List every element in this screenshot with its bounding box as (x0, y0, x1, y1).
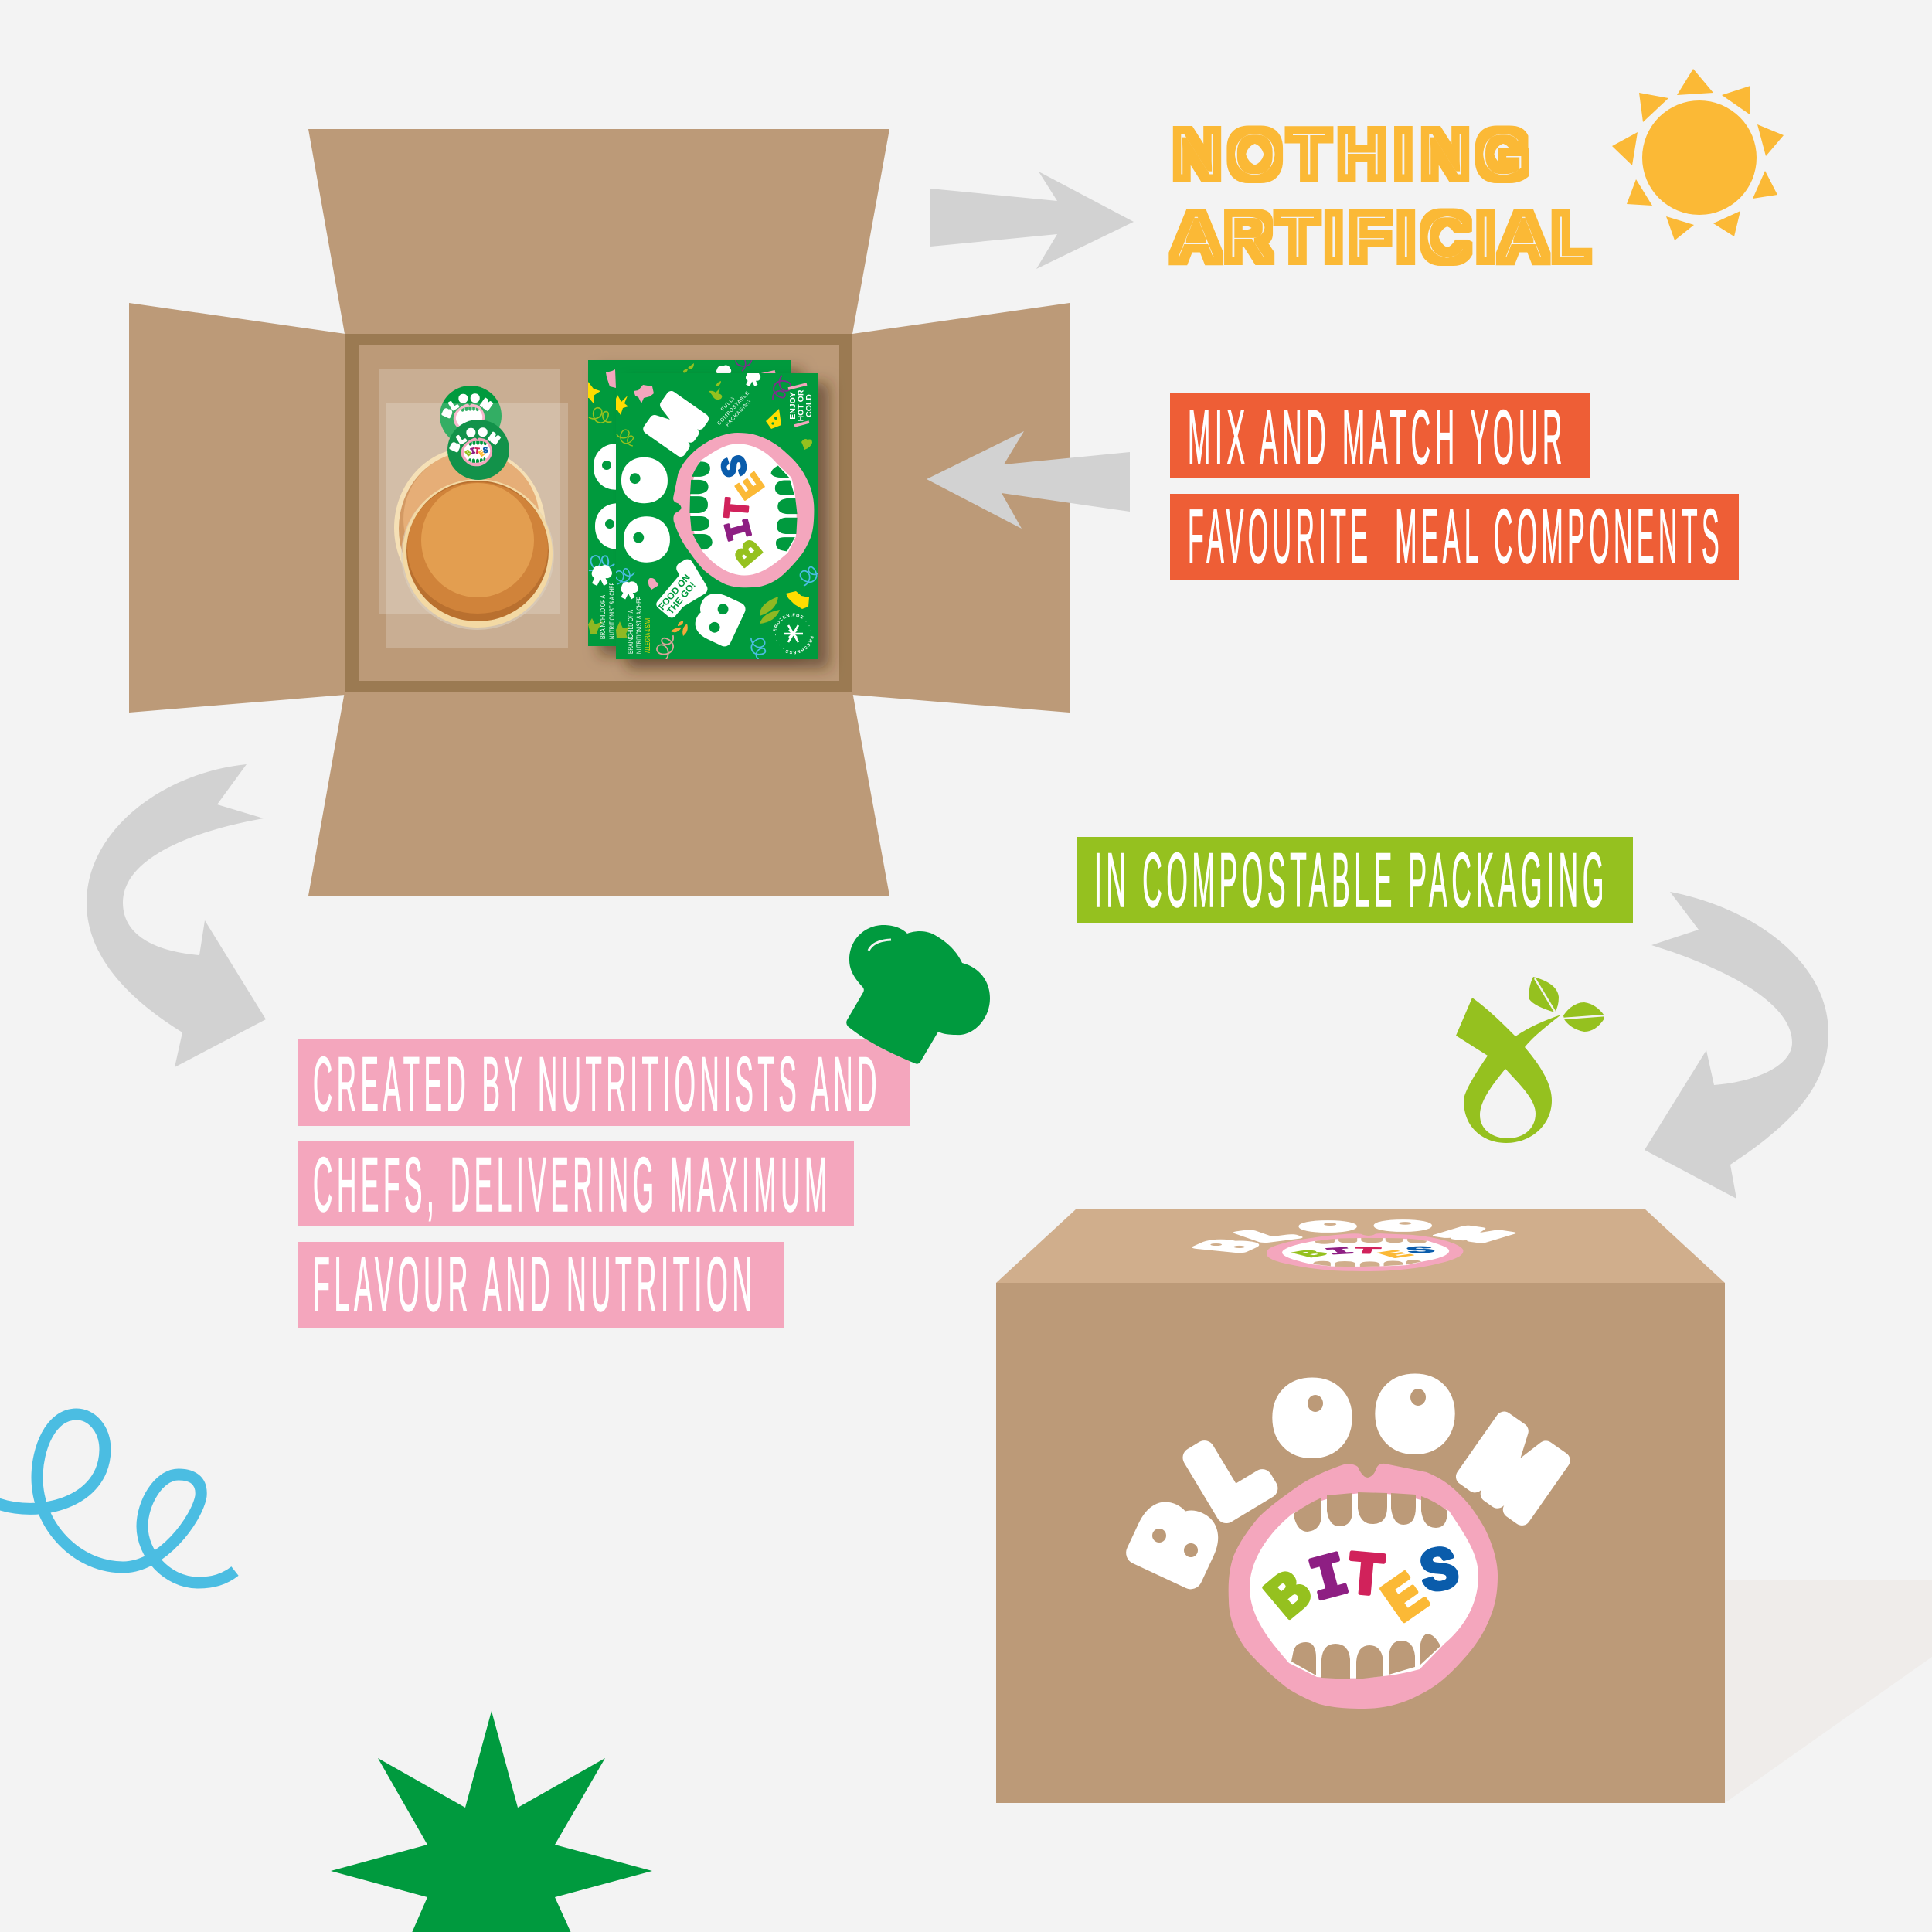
text: FLAVOUR AND NUTRITION (313, 1241, 757, 1327)
box front (996, 1283, 1725, 1803)
card text: fully compostable packaging: PACKAGING (725, 398, 753, 427)
label: chefs delivering (298, 1141, 854, 1227)
back sticker: O (472, 394, 479, 403)
card icon: cutlery (788, 384, 809, 426)
back sticker (440, 386, 502, 446)
front sticker: L (455, 432, 468, 446)
front sticker: O (480, 428, 487, 437)
front logo: Bloom Bites: B (1119, 1495, 1231, 1590)
card text: enjoy hot or cold (790, 389, 811, 421)
front logo: Bloom Bites: T (1345, 1543, 1387, 1614)
card icons: squiggles (611, 375, 821, 661)
box lid (996, 1209, 1725, 1283)
card icon: lime star (616, 621, 630, 638)
front pancake (401, 479, 554, 630)
front sticker: S (482, 446, 489, 456)
front logo: Bloom Bites: M (1447, 1398, 1580, 1539)
card logo: Bloom Bites: O (624, 523, 671, 556)
back sticker: L (447, 398, 460, 412)
text: CHEFS, DELIVERING MAXIMUM (313, 1141, 832, 1227)
label: created by nutritionists (298, 1039, 910, 1127)
back film packet (379, 369, 560, 614)
back sticker: B (440, 407, 454, 419)
back sticker: O (460, 394, 467, 403)
decoration: green star (331, 1711, 652, 1932)
lid logo (1187, 1219, 1523, 1271)
card logo: Bloom Bites: O (622, 464, 668, 496)
card badge: frozen for freshness (773, 614, 814, 654)
card badge: frozen for freshness: FROZEN FOR (773, 614, 804, 631)
back product card (584, 346, 791, 646)
card icon: pink heart (648, 578, 658, 590)
card text: enjoy hot or cold: ENJOY (788, 392, 798, 420)
open cardboard box (129, 129, 1070, 896)
label: mix and match (1170, 393, 1590, 480)
front logo: Bloom Bites: O (1386, 1373, 1444, 1454)
card logo: Bloom Bites: B (729, 531, 772, 572)
back product card: O (594, 451, 640, 483)
arrow: box to nothing artificial (930, 172, 1134, 269)
card text: brainchild: NUTRITIONIST & A CHEF: (635, 596, 643, 654)
lid logo: O (1308, 1220, 1349, 1233)
lid logo: T (1352, 1246, 1383, 1257)
lid logo: B (1187, 1238, 1269, 1253)
card artwork (616, 373, 818, 659)
card text: fully compostable packaging: COMPOSTABLE (716, 390, 751, 427)
lid logo: O (1383, 1219, 1423, 1232)
arrow: curved right (1645, 892, 1828, 1199)
card logo: Bloom Bites (622, 386, 814, 650)
box flap: left (129, 303, 345, 713)
card text: brainchild (628, 597, 650, 654)
card badge: frozen for freshness: FRESHNESS (785, 636, 814, 654)
arrow: curved left (87, 764, 266, 1067)
back product card: BRAINCHILD OF A (599, 595, 607, 639)
arrow: mix and match to box (927, 431, 1130, 529)
front logo: Bloom Bites: E (1372, 1562, 1441, 1638)
heading: nothing artificial (1174, 118, 1588, 273)
card icon: wheat (786, 591, 809, 609)
front sticker: O (468, 428, 474, 437)
card text: brainchild: ALLEGRA & SAM (644, 618, 651, 653)
back sticker: M (478, 396, 494, 413)
front sticker: B (464, 448, 474, 459)
lid logo: E (1372, 1249, 1422, 1260)
box flap: bottom (308, 692, 889, 896)
back pancake (394, 447, 546, 608)
front logo: Bloom Bites (1119, 1373, 1580, 1709)
lid logo: B (1287, 1248, 1338, 1260)
front product card (616, 372, 838, 677)
card icon: broccoli (746, 373, 760, 386)
card icon: cheese (766, 409, 781, 429)
label: flavour and nutrition (298, 1241, 784, 1328)
heading: nothing artificial: NOTHING (1174, 118, 1528, 190)
card logo: Bloom Bites: L (644, 558, 713, 617)
card logo: Bloom Bites: S (716, 452, 757, 480)
front logo: Bloom Bites: I (1304, 1543, 1356, 1617)
card logo: Bloom Bites: M (635, 386, 716, 462)
label: in compostable packaging (1077, 837, 1633, 923)
card text: enjoy hot or cold: COLD (804, 394, 814, 417)
front logo: Bloom Bites: S (1416, 1537, 1464, 1610)
box interior (359, 345, 839, 681)
lid logo: S (1403, 1245, 1438, 1256)
text: CREATED BY NUTRITIONISTS AND (313, 1041, 881, 1127)
card icon: sprout (709, 381, 722, 400)
card icon: pig (634, 385, 654, 403)
closed cardboard box (996, 1209, 1725, 1803)
card text: enjoy hot or cold: HOT OR (796, 389, 805, 421)
card logo: Bloom Bites: E (730, 465, 774, 505)
front sticker: T (474, 447, 481, 457)
heading: nothing artificial: ARTIFICIAL (1175, 201, 1588, 273)
label on logo: food on the go: THE GO! (665, 580, 698, 617)
front sticker: M (486, 430, 502, 447)
back product card: NUTRITIONIST & A CHEF: (608, 581, 616, 639)
front logo: Bloom Bites: L (1177, 1414, 1281, 1533)
lid logo: M (1426, 1223, 1523, 1245)
front sticker: E (478, 449, 488, 460)
label on logo: food on the go: FOOD ON (656, 572, 692, 612)
front sticker: I (469, 447, 477, 457)
front logo: Bloom Bites: B (1255, 1560, 1326, 1634)
card icon: lime heart (801, 439, 812, 450)
card logo: Bloom Bites: I (719, 514, 762, 544)
card icon: star (616, 395, 628, 415)
card icon: orange leaves (671, 621, 688, 636)
card logo: Bloom Bites: T (719, 496, 760, 521)
card background (616, 373, 818, 659)
back product card: O (595, 510, 641, 543)
card logo: Bloom Bites: B (692, 586, 747, 650)
icon: sun (1612, 69, 1784, 240)
floor shadow of closed box (1725, 1580, 1932, 1803)
front sticker (447, 420, 509, 480)
card icon: peas (760, 597, 780, 624)
front sticker: B (448, 441, 461, 453)
box flap: right (852, 303, 1070, 713)
icon: sprout (1456, 977, 1605, 1143)
front logo: Bloom Bites: O (1284, 1377, 1341, 1458)
card text: fully compostable packaging: FULLY (720, 395, 737, 413)
card icon: broccoli lower (621, 581, 638, 600)
icon: chef hat (846, 925, 990, 1064)
box rim (345, 334, 852, 692)
box flap: top (308, 129, 889, 334)
lid logo: L (1230, 1226, 1304, 1244)
lid logo: I (1321, 1246, 1360, 1257)
front film packet (386, 403, 568, 648)
card text: brainchild: BRAINCHILD OF A (627, 610, 634, 654)
decoration: blue squiggle (0, 1414, 235, 1583)
